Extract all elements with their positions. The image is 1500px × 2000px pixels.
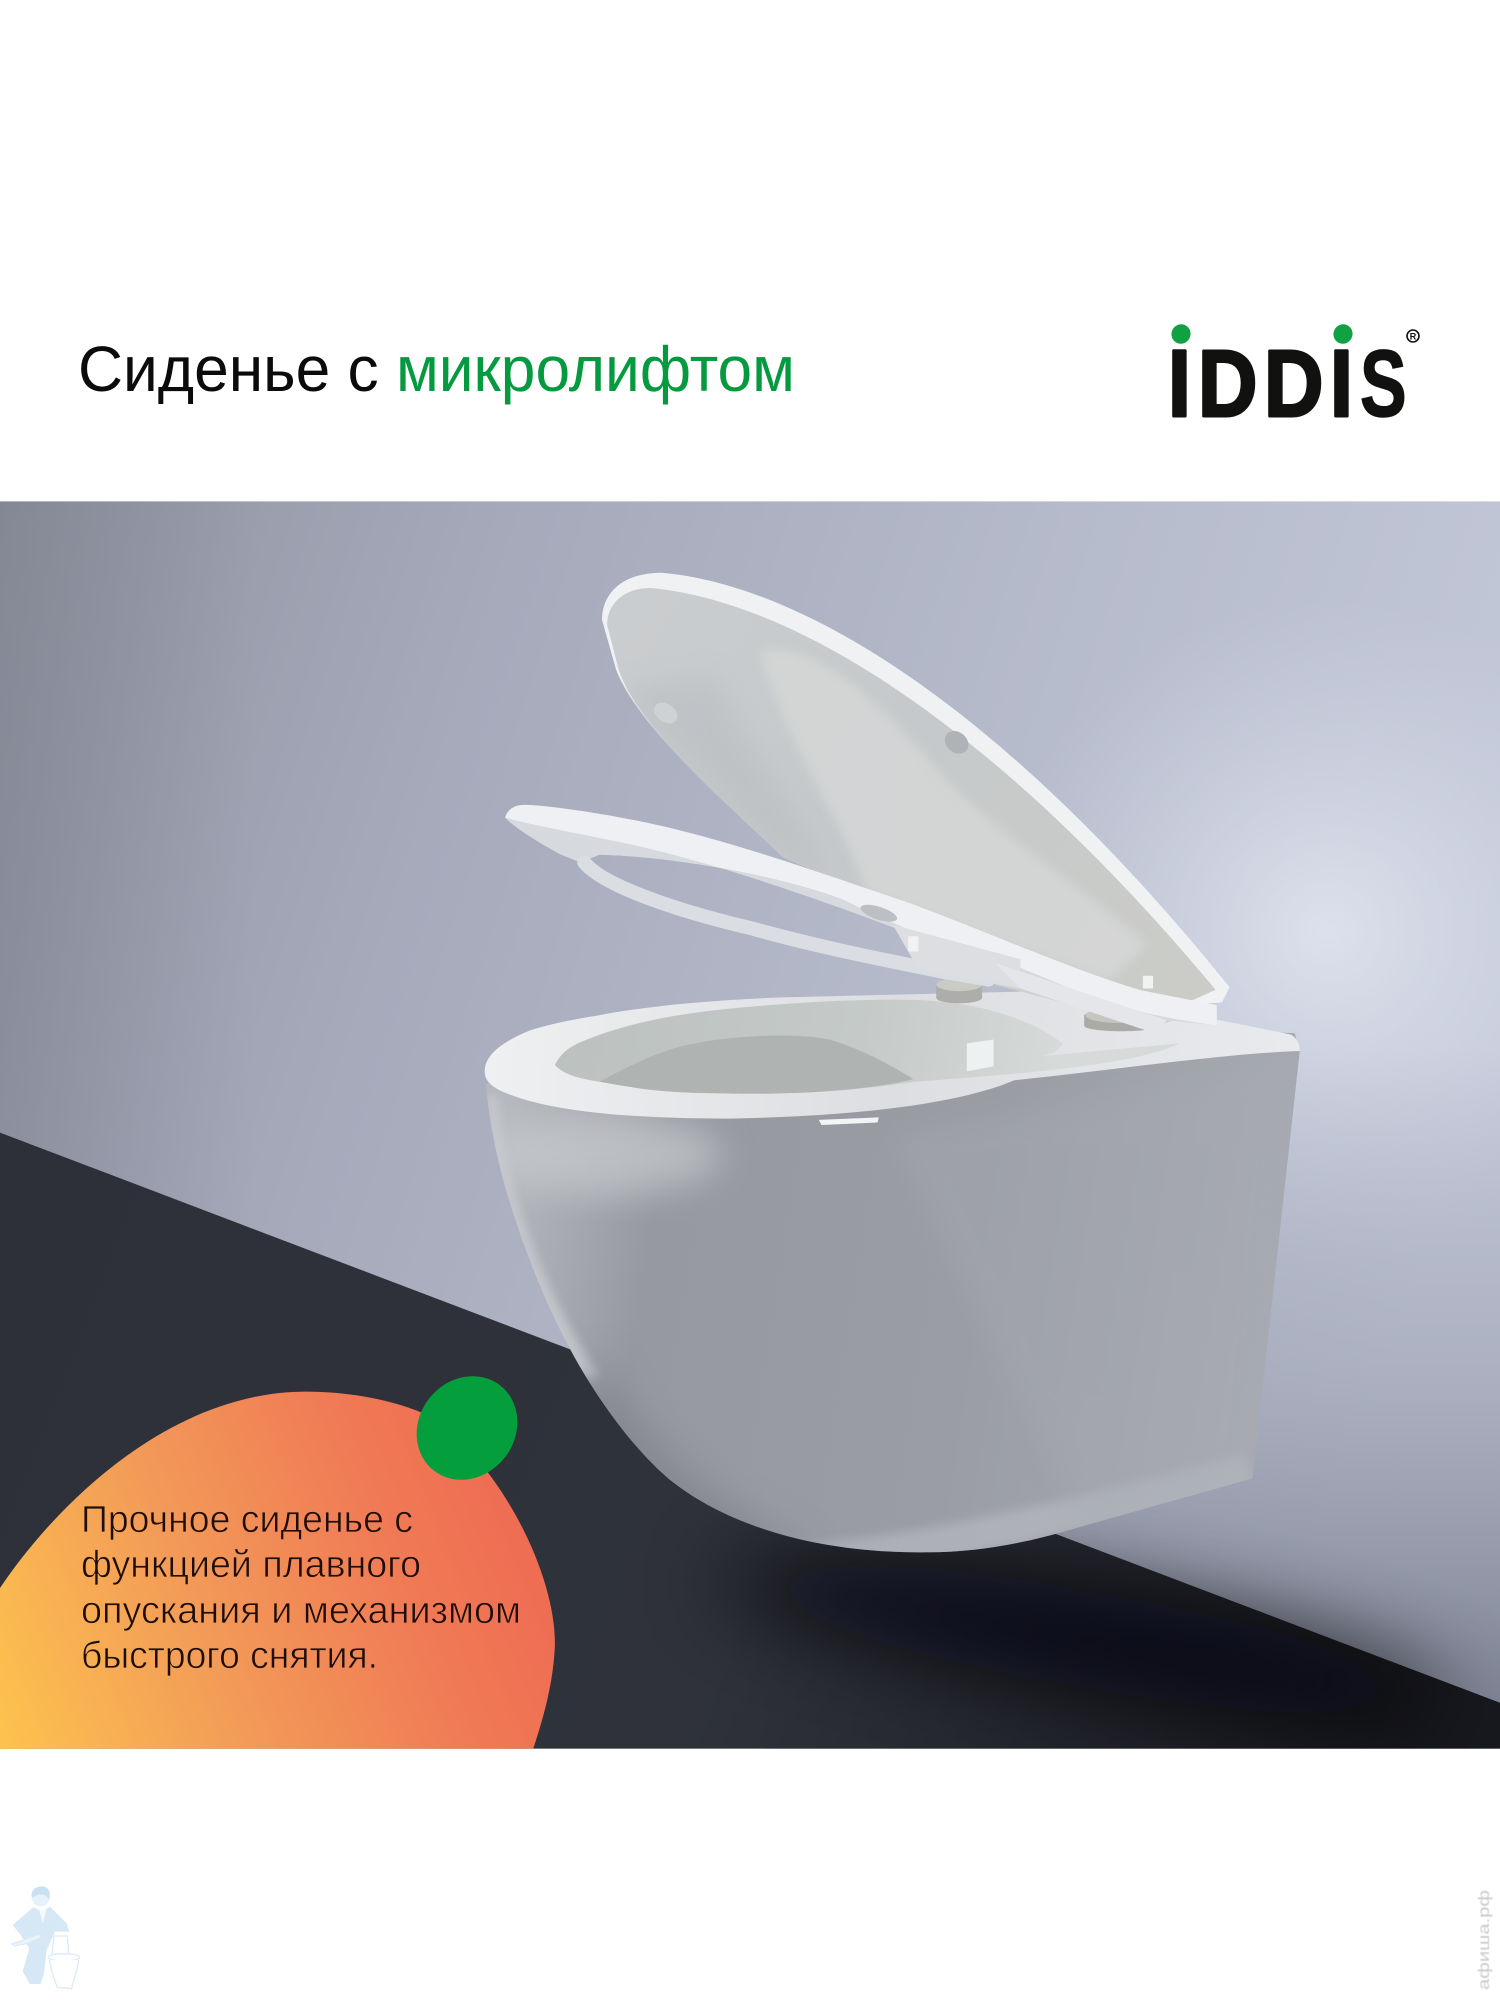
lid (raised) bbox=[602, 573, 1230, 1020]
callout text: функцией плавного bbox=[81, 1544, 421, 1586]
toilet body bbox=[478, 990, 1300, 1562]
callout: orange blob bbox=[0, 1392, 555, 1749]
bowl opening bbox=[555, 1000, 1180, 1093]
watermark: plumber with toilet bbox=[12, 1887, 80, 1989]
product photo: wall-hung toilet bbox=[0, 501, 1500, 1751]
rim bbox=[485, 990, 1300, 1119]
watermark: site name: афиша.рф bbox=[1476, 1890, 1493, 1990]
logo: IDDIS: S bbox=[1360, 331, 1407, 436]
seat hinges bbox=[936, 980, 1171, 1032]
logo: IDDIS: R bbox=[1410, 332, 1417, 342]
specular highlight bbox=[819, 1117, 879, 1125]
callout text: опускания и механизмом bbox=[81, 1590, 521, 1632]
green accent dot bbox=[396, 1356, 538, 1500]
seat ring bbox=[505, 805, 1217, 1033]
title: Сиденье с микролифтом bbox=[78, 333, 795, 405]
callout text: быстрого снятия. bbox=[81, 1635, 378, 1677]
callout text: Прочное сиденье с bbox=[81, 1499, 413, 1541]
callout text bbox=[81, 1499, 521, 1677]
logo: IDDIS bbox=[1168, 321, 1419, 436]
logo: IDDIS: IDDI bbox=[1168, 331, 1353, 436]
